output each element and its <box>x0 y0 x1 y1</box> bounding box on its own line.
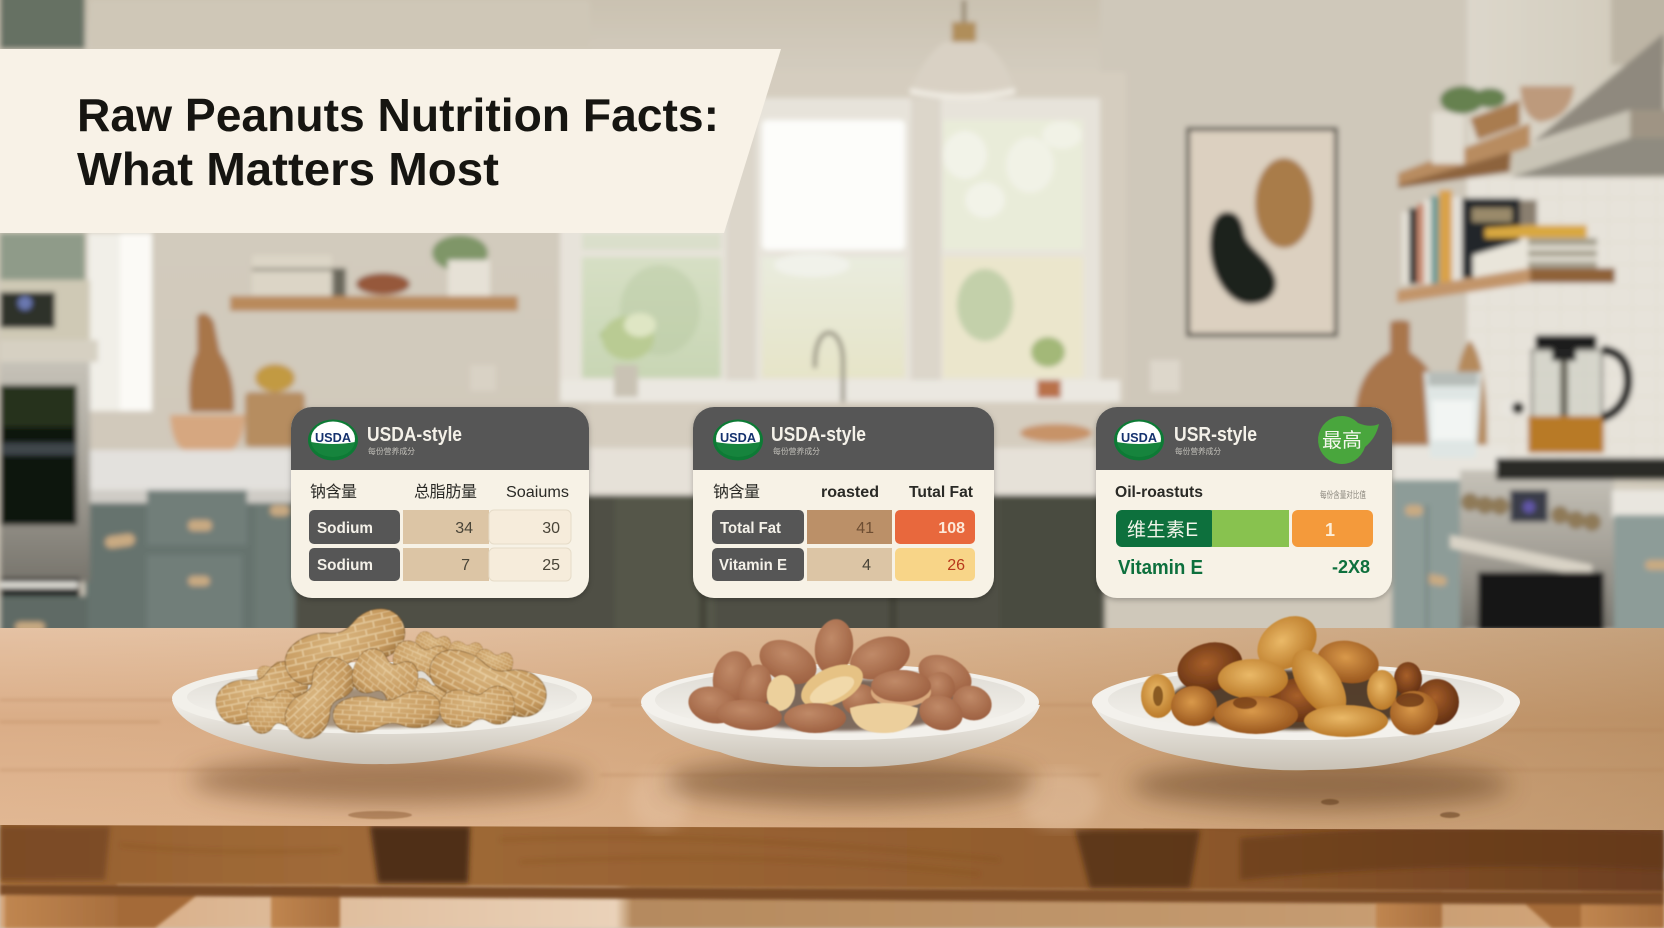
plate of raw skin-on peanuts <box>641 617 1040 806</box>
title text: What Matters Most <box>77 143 499 195</box>
oven <box>0 280 98 636</box>
table rows: 25 <box>542 557 560 574</box>
plate of raw in-shell peanuts <box>172 601 592 804</box>
window <box>560 72 1126 402</box>
centre counter and dark cabinets <box>295 402 1115 635</box>
nutrition card: oil-roasted peanuts: 每份含量对比值 <box>1320 489 1366 500</box>
column headers: Tutal Fat <box>909 484 974 501</box>
USDA logo: USDA <box>1121 430 1158 445</box>
plate of oil-roasted peanuts <box>1092 605 1520 809</box>
title banner <box>0 49 781 233</box>
table rows: 4 <box>862 557 871 574</box>
column headers: Oil-roastuts <box>1115 484 1203 501</box>
highest badge: 最高 <box>1322 429 1362 452</box>
table rows: Total Fat <box>720 520 782 537</box>
left wall, shelf and utensils <box>0 0 1180 452</box>
column headers <box>310 483 569 501</box>
table rows: Vitamin E <box>719 557 787 574</box>
table top <box>0 628 1664 830</box>
USDA logo <box>713 420 763 460</box>
window plants and faucet <box>600 313 1065 402</box>
column headers: 钠含量 <box>713 483 760 501</box>
column headers: 钠含量 <box>310 483 357 501</box>
column headers: roasted <box>821 484 879 501</box>
USDA logo: USDA <box>315 430 352 445</box>
card header text: USDA-style <box>771 424 866 446</box>
vitamin E row: Vitamin E <box>1118 557 1203 579</box>
wooden table <box>0 628 1664 928</box>
USDA logo <box>308 420 358 460</box>
pendant lamp <box>910 0 1015 99</box>
table rows: 41 <box>856 520 874 537</box>
title text: Raw Peanuts Nutrition Facts: <box>77 89 719 141</box>
right shelves and books <box>1397 86 1615 303</box>
nutrition card: raw peanuts <box>291 407 589 598</box>
table rows: 26 <box>947 557 965 574</box>
highest badge <box>1318 416 1379 464</box>
nutrition card: dry-roasted peanuts <box>693 407 994 598</box>
vitamin E bar: 1 <box>1325 520 1335 540</box>
table rows <box>309 510 571 581</box>
nutrition card: raw peanuts: 每份营养成分 <box>368 446 415 456</box>
left counter and cabinets <box>85 450 300 633</box>
column headers: 总脂肪量 <box>414 483 477 501</box>
table rows: 34 <box>455 520 473 537</box>
table legs <box>0 880 1664 928</box>
table edge <box>0 820 1664 892</box>
title text <box>77 89 719 195</box>
USDA logo: USDA <box>720 430 757 445</box>
column headers <box>713 483 974 501</box>
kitchen background scene <box>0 0 1664 650</box>
wall art with peanut shapes <box>1188 129 1336 335</box>
vitamin E bar: 维生素E <box>1127 519 1198 541</box>
nutrition card: dry-roasted peanuts: 每份营养成分 <box>773 446 820 456</box>
table rows: Sodium <box>317 557 373 574</box>
vitamin E bar <box>1116 510 1373 547</box>
USDA logo <box>1114 420 1164 460</box>
table rows: 108 <box>938 520 965 537</box>
card header text: USR-style <box>1174 424 1257 446</box>
table rows: 7 <box>461 557 470 574</box>
stove range <box>1392 458 1664 635</box>
column headers: Soaiums <box>506 484 569 501</box>
floor <box>0 880 1664 928</box>
cutting boards, glass and kettle <box>1355 320 1628 487</box>
table rows <box>712 510 975 581</box>
nutrition card: oil-roasted peanuts: 每份营养成分 <box>1175 446 1221 456</box>
table rows: 30 <box>542 520 560 537</box>
range hood <box>1512 0 1664 177</box>
nutrition card: oil-roasted peanuts: -2X8 <box>1332 557 1370 577</box>
nutrition card: oil-roasted peanuts <box>1096 407 1392 598</box>
table rows: Sodium <box>317 520 373 537</box>
card header text: USDA-style <box>367 424 462 446</box>
